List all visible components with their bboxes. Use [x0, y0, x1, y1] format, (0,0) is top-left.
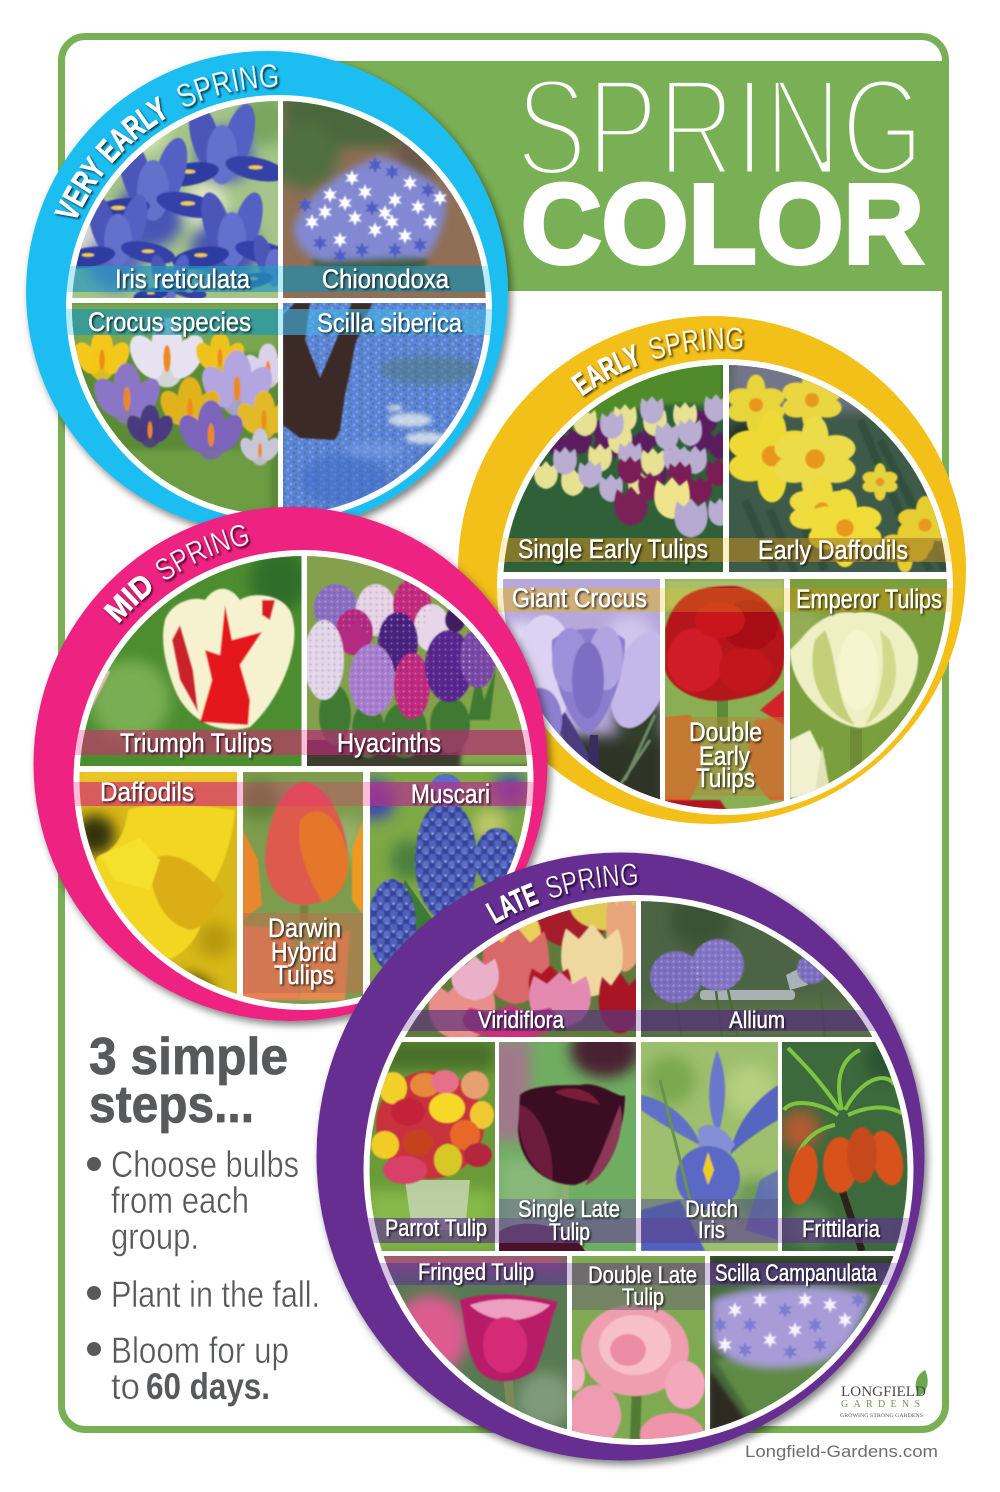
photo: chionodoxa [283, 101, 486, 298]
photo: frittilaria [782, 1042, 908, 1251]
photo labels: mid spring: Daffodils [100, 777, 194, 807]
photo labels: early spring: Emperor Tulips [796, 584, 942, 614]
logo: Longfield Gardens: GARDENS [841, 1399, 920, 1410]
ring heading: very early spring [54, 64, 281, 220]
photo labels: late spring: Fringed Tulip [418, 1259, 534, 1286]
photo labels: late spring: Dutch [685, 1196, 738, 1223]
bullet: choose bulbs: Choose bulbs [111, 1144, 299, 1185]
photo: single late tulip [499, 1042, 636, 1251]
photo labels: late spring: Double Late [588, 1262, 697, 1289]
title: COLOR: COLOR [521, 161, 924, 287]
photo: darwin hybrid tulips [243, 772, 363, 1004]
photo labels: early spring: Giant Crocus [512, 583, 647, 613]
photo labels: early spring: Single Early Tulips [518, 534, 708, 564]
photo labels: very early spring: Iris reticulata [115, 264, 251, 294]
panel: very early spring circle [24, 50, 516, 528]
bullet: bloom for up to 60 days: 60 days. [146, 1366, 270, 1407]
photo labels: very early spring [88, 264, 463, 338]
photo: triumph tulips [80, 556, 302, 766]
bullet: bloom for up to 60 days [87, 1330, 289, 1407]
photo labels: early spring [512, 534, 942, 793]
ring heading: early spring [570, 327, 746, 399]
photo: crocus species [72, 303, 278, 512]
photo: giant crocus [503, 579, 660, 800]
photo labels: mid spring: Hyacinths [337, 728, 441, 758]
bullet: choose bulbs: from each [111, 1180, 249, 1221]
photo labels: early spring: Early Daffodils [758, 535, 908, 565]
ring heading: mid spring: SPRING [156, 524, 252, 583]
bullet: bloom for up to 60 days: to [111, 1366, 140, 1407]
photo: double late tulip [572, 1256, 705, 1439]
tinted label bands over white ring [60, 266, 500, 335]
photo labels: very early spring: Crocus species [88, 307, 251, 337]
bullet: bloom for up to 60 days: Bloom for up [111, 1330, 289, 1371]
bullet: choose bulbs: group. [111, 1216, 199, 1257]
photo labels: very early spring: Scilla siberica [317, 308, 463, 338]
photo labels: late spring: Frittilaria [802, 1216, 881, 1243]
photo: allium [641, 901, 872, 1037]
bullet: plant in the fall: Plant in the fall. [111, 1274, 320, 1315]
photo labels: mid spring [100, 728, 490, 990]
ring heading: very early spring: VERY EARLY [54, 96, 168, 220]
photo labels: late spring: Parrot Tulip [385, 1215, 487, 1242]
photo: viridiflora [404, 901, 636, 1037]
photo: iris reticulata [72, 101, 278, 298]
bullet: choose bulbs [87, 1144, 299, 1257]
heading: 3 simple steps: 3 simple [89, 1028, 288, 1086]
photo labels: late spring: Scilla Campanulata [715, 1260, 878, 1287]
logo: Longfield Gardens [840, 1370, 928, 1419]
photo: muscari [370, 772, 528, 984]
tinted label bands over white ring [360, 1010, 920, 1285]
text block: steps list [87, 1144, 320, 1407]
photo labels: early spring: Double [689, 717, 762, 747]
photo: daffodils [80, 772, 237, 994]
panel: late spring circle [314, 851, 933, 1470]
logo: Longfield Gardens: GROWING STRONG GARDENS [840, 1414, 923, 1419]
photo labels: late spring: Tulip [549, 1219, 590, 1246]
photo labels: late spring [385, 1007, 881, 1311]
ring heading: late spring: SPRING [546, 863, 640, 901]
photo: parrot tulip [370, 1042, 495, 1251]
ring heading: late spring: LATE [485, 882, 542, 926]
tinted label bands over white ring [65, 730, 545, 806]
photo labels: mid spring: Hybrid [271, 937, 337, 967]
photo labels: early spring: Tulips [696, 763, 755, 793]
photo labels: mid spring: Darwin [268, 913, 341, 943]
heading: 3 simple steps [89, 1028, 288, 1134]
photo labels: mid spring: Muscari [411, 779, 490, 809]
photo: hyacinths [307, 556, 527, 766]
tinted label bands over white ring [490, 538, 960, 612]
photo labels: late spring: Iris [698, 1217, 725, 1244]
heading: 3 simple steps: steps... [89, 1076, 254, 1134]
photo labels: late spring: Viridiflora [478, 1007, 565, 1034]
ring heading: late spring [485, 863, 640, 926]
panel: mid spring circle [31, 506, 556, 1030]
photo labels: early spring: Early [699, 741, 750, 771]
photo: double early tulips [665, 579, 784, 809]
photo: single early tulips [504, 365, 723, 572]
footer url: Longfield-Gardens.com [745, 1442, 938, 1461]
logo: Longfield Gardens: LONGFIELD [841, 1384, 926, 1400]
photo: dutch iris [641, 1042, 778, 1251]
green title panel [330, 50, 942, 291]
ring heading: very early spring: SPRING [177, 64, 281, 110]
photo labels: late spring: Allium [729, 1007, 785, 1034]
photo labels: late spring: Tulip [622, 1284, 664, 1311]
ring heading: early spring: SPRING [648, 327, 746, 362]
photo: emperor tulips [790, 579, 947, 800]
ring heading: mid spring [103, 524, 252, 626]
panel: early spring circle [458, 316, 966, 824]
photo labels: very early spring: Chionodoxa [322, 264, 450, 294]
photo labels: mid spring: Triumph Tulips [120, 728, 272, 758]
ring heading: early spring: EARLY [570, 344, 640, 399]
photo labels: mid spring: Tulips [274, 960, 334, 990]
photo: early daffodils [729, 365, 946, 572]
photo: fringed tulip [384, 1256, 567, 1430]
photo: scilla siberica [283, 303, 486, 510]
photo labels: late spring: Single Late [518, 1196, 620, 1223]
photo: scilla campanulata [710, 1256, 894, 1430]
ring heading: mid spring: MID [103, 576, 154, 626]
